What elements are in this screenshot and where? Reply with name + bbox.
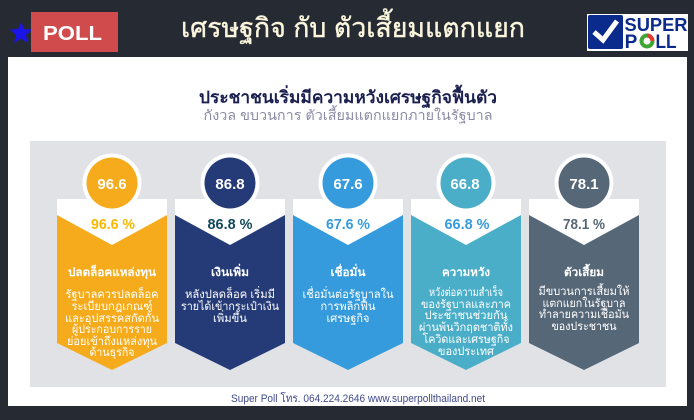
card: 67.6: 67.6 (333, 176, 363, 193)
card: 67.6: การพลิกฟื้น (320, 298, 376, 313)
footer contact: Super Poll โทร. 064.224.2646 www.superpollthailand.net (231, 391, 485, 405)
card: 66.8 (411, 154, 521, 370)
card: 66.8: ของประเทศ (438, 346, 495, 358)
card: 78.1: 78.1 % (563, 216, 605, 233)
card: 96.6 (57, 154, 167, 370)
subheading: กังวล ขบวนการ ตัวเสี้ยมแตกแยกภายในรัฐบาล (204, 105, 492, 124)
card: 78.1 (529, 154, 639, 370)
logo: Super Poll: P (625, 32, 638, 53)
card: 78.1: มีขบวนการเสี้ยมให้ (538, 283, 630, 298)
card: 86.8: เพิ่มขึ้น (213, 310, 247, 325)
card: 96.6: ระเบียบกฎเกณฑ์ (72, 299, 152, 313)
card: 96.6: รัฐบาลควรปลดล็อค (66, 286, 158, 301)
card: 86.8: 86.8 (215, 176, 245, 193)
card: 86.8: หลังปลดล็อค เริ่มมี (185, 286, 275, 301)
card: 67.6: 67.6 % (326, 216, 370, 233)
card: 66.8: ของรัฐบาลและภาค (421, 299, 511, 311)
logo: Super Poll: SUPER (624, 15, 688, 35)
card: 66.8: ประชาชนช่วยกัน (424, 310, 508, 322)
badge: POLL: POLL (43, 23, 102, 45)
card: 96.6: ด้านธุรกิจ (90, 346, 134, 359)
card: 78.1: แตกแยกในรัฐบาล (542, 297, 626, 310)
card: 67.6: เศรษฐกิจ (326, 312, 370, 325)
logo: Super Poll: LL (656, 32, 677, 53)
card: 96.6: 96.6 (97, 176, 127, 193)
card: 78.1: ตัวเสี้ยม (564, 263, 604, 279)
card: 96.6: 96.6 % (91, 216, 135, 233)
card: 67.6: เชื่อมั่น (330, 263, 366, 279)
title: เศรษฐกิจ กับ ตัวเสี้ยมแตกแยก (181, 8, 525, 44)
card: 66.8: โควิดและเศรษฐกิจ (422, 332, 510, 346)
card: 96.6: ผู้ประกอบการราย (72, 323, 152, 336)
icon: blue star (10, 22, 32, 43)
card: 96.6: และอุปสรรคสกัดกั้น (65, 310, 159, 325)
card: 66.8: ผ่านพ้นวิกฤตชาติทั้ง (419, 319, 513, 334)
badge: POLL (31, 12, 118, 52)
card: 67.6: เชื่อมั่นต่อรัฐบาลใน (302, 286, 394, 301)
card: 66.8: ความหวัง (442, 266, 490, 279)
card: 86.8 (175, 154, 285, 370)
card: 86.8: รายได้เข้ากระเป๋าเงิน (181, 300, 279, 313)
card: 66.8: 66.8 (450, 176, 480, 193)
heading: ประชาชนเริ่มมีความหวังเศรษฐกิจฟื้นตัว (199, 84, 497, 109)
card: 78.1: ของประชาชน (552, 321, 617, 333)
card: 96.6: ปลดล็อคแหล่งทุน (68, 264, 156, 280)
logo: Super Poll (587, 14, 688, 53)
card: 78.1: ทำลายความเชื่อมั่น (539, 306, 629, 321)
card: 86.8: 86.8 % (208, 216, 252, 233)
card: 67.6 (293, 154, 403, 370)
card: 96.6: ย่อยเข้าถึงแหล่งทุน (67, 335, 157, 348)
card: 66.8: 66.8 % (444, 216, 490, 233)
card: 86.8: เงินเพิ่ม (211, 263, 249, 279)
panel: grey background (30, 141, 666, 387)
card: 78.1: 78.1 (569, 176, 599, 193)
card: 66.8: หวังต่อความสำเร็จ (429, 284, 503, 299)
